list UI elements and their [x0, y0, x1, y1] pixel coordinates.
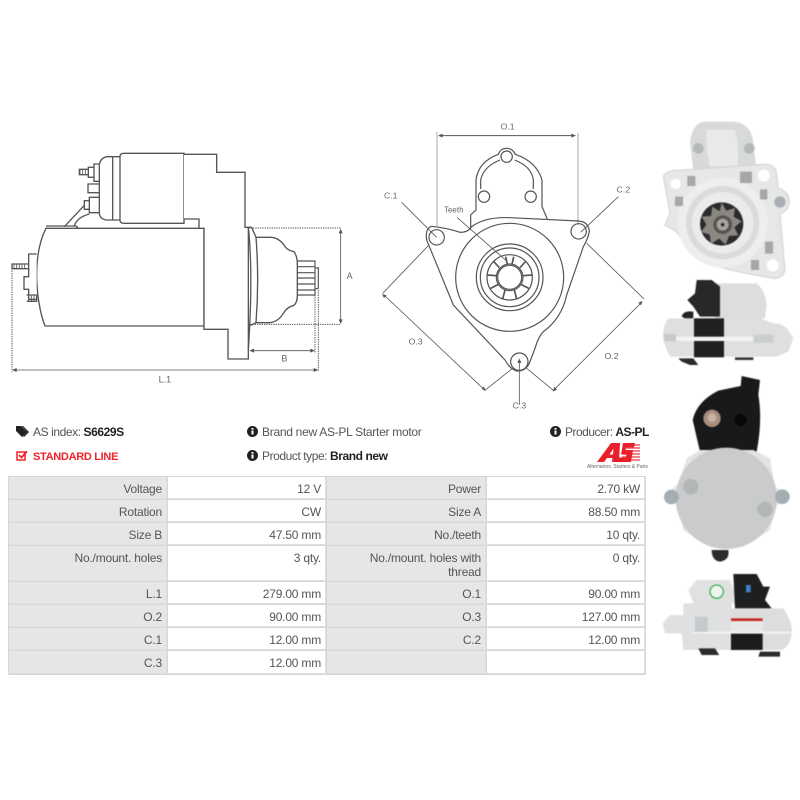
row: C.1 / C.2: C.1	[144, 633, 162, 647]
icon: checkbox	[16, 450, 28, 461]
info: product type: Product type: Brand new	[262, 449, 388, 463]
front view technical drawing: O.2	[605, 351, 619, 361]
row: size B / teeth: No./teeth	[434, 528, 481, 542]
logo: AS	[587, 443, 648, 470]
side view technical drawing: L.1	[159, 374, 171, 384]
solenoid	[99, 153, 184, 223]
info: description: Brand new AS-PL Starter motor	[262, 425, 422, 439]
row: size B / teeth: 10 qty.	[606, 528, 640, 542]
drive housing	[184, 154, 248, 359]
front view technical drawing: Teeth	[444, 205, 464, 214]
pinion teeth	[487, 257, 532, 299]
front view technical drawing: C.3	[513, 400, 526, 410]
specification table	[8, 476, 646, 675]
row: O.2 / O.3: 127.00 mm	[582, 610, 640, 624]
row: rotation / size A	[9, 500, 645, 522]
row: C.1 / C.2: 12.00 mm	[588, 633, 640, 647]
row: rotation / size A: Size A	[448, 505, 481, 519]
row: mounting holes: thread	[448, 565, 481, 579]
row: size B / teeth: Size B	[129, 528, 162, 542]
row: voltage / power: 2.70 kW	[597, 482, 640, 496]
row: mounting holes: 0 qty.	[613, 551, 640, 565]
wire	[46, 205, 89, 228]
info: standard line: STANDARD LINE	[33, 451, 118, 463]
row: O.2 / O.3: O.3	[462, 610, 481, 624]
row: C.1 / C.2: 12.00 mm	[269, 633, 321, 647]
front view technical drawing: C.1	[384, 190, 398, 200]
info: AS index: AS index: S6629S	[33, 425, 124, 439]
side view technical drawing: A	[347, 271, 353, 281]
row: rotation / size A: Rotation	[119, 505, 162, 519]
row: voltage / power: Power	[448, 482, 481, 496]
row: mounting holes	[9, 546, 645, 581]
row: C.3: 12.00 mm	[269, 656, 321, 670]
row: O.2 / O.3	[9, 605, 645, 627]
row: O.2 / O.3: O.2	[143, 610, 162, 624]
row: L.1 / O.1: 90.00 mm	[588, 587, 640, 601]
row: rotation / size A: CW	[301, 505, 321, 519]
pinion teeth	[297, 261, 318, 295]
row: mounting holes: No./mount. holes	[74, 551, 162, 565]
row: L.1 / O.1: L.1	[146, 587, 162, 601]
icon: info	[247, 450, 258, 461]
bearing circles	[456, 223, 564, 331]
row: mounting holes: 3 qty.	[294, 551, 321, 565]
row: C.1 / C.2: C.2	[463, 633, 481, 647]
dimension lines	[12, 228, 341, 372]
row: voltage / power: 12 V	[297, 482, 321, 496]
solenoid terminals	[79, 164, 99, 213]
front view technical drawing: C.2	[617, 184, 630, 194]
front view technical drawing: O.1	[501, 121, 515, 131]
row: L.1 / O.1	[9, 582, 645, 604]
row: C.3	[9, 651, 645, 674]
rear terminals	[12, 254, 37, 301]
side view technical drawing: B	[281, 354, 287, 364]
info: producer: Producer: AS-PL	[565, 425, 649, 439]
row: O.2 / O.3: 90.00 mm	[269, 610, 321, 624]
icon: info	[247, 426, 258, 437]
row: L.1 / O.1: 279.00 mm	[263, 587, 321, 601]
solenoid mount outline	[471, 148, 547, 228]
icon: tags	[16, 426, 29, 437]
row: mounting holes: No./mount. holes with	[370, 551, 481, 565]
row: voltage / power	[9, 477, 645, 499]
icon: info	[550, 426, 561, 437]
dimension lines	[437, 132, 578, 227]
row: size B / teeth: 47.50 mm	[269, 528, 321, 542]
row: size B / teeth	[9, 523, 645, 545]
row: C.3: C.3	[144, 656, 162, 670]
mounting holes	[429, 230, 444, 245]
row: C.1 / C.2	[9, 628, 645, 650]
row: rotation / size A: 88.50 mm	[588, 505, 640, 519]
flange	[426, 218, 589, 371]
front view technical drawing: O.3	[409, 336, 423, 346]
motor body	[37, 228, 204, 326]
row: voltage / power: Voltage	[123, 482, 162, 496]
row: L.1 / O.1: O.1	[462, 587, 481, 601]
pinion nose	[248, 227, 297, 325]
